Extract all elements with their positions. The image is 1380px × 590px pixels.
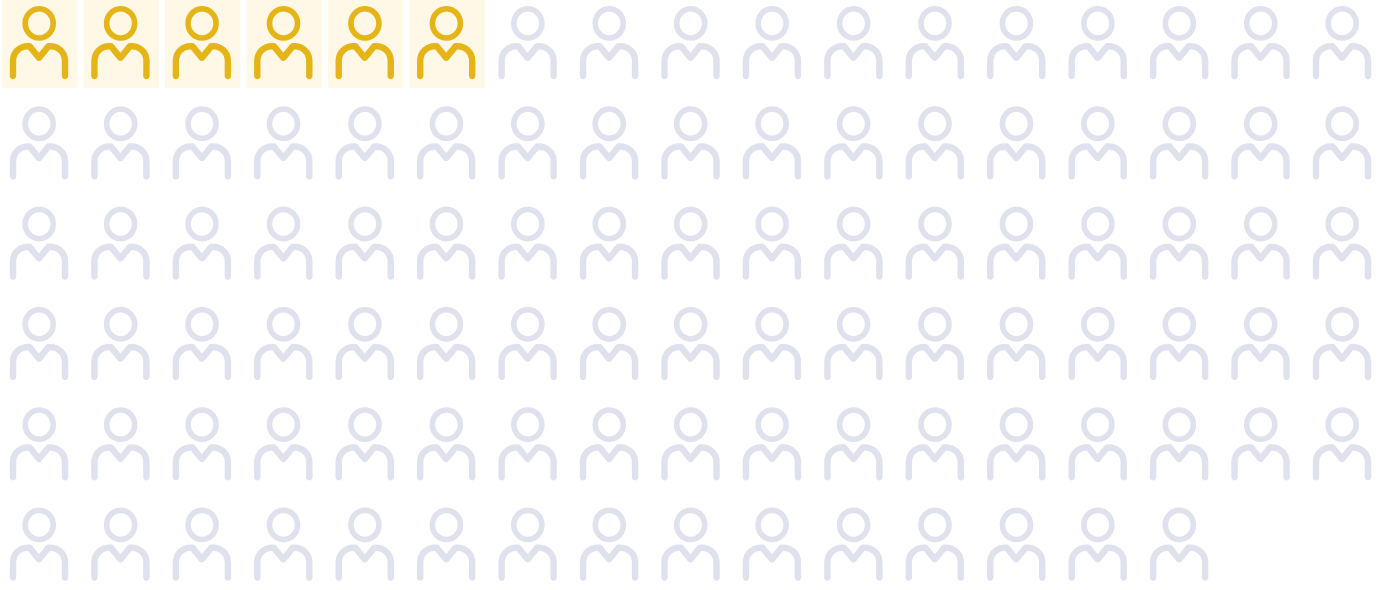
row 5: grey people bbox=[13, 410, 1368, 477]
row 1: remaining grey people bbox=[502, 9, 1368, 76]
row 6: grey people bbox=[13, 510, 1205, 578]
row 2: grey people bbox=[13, 109, 1368, 176]
icon: highlighted person 3 bbox=[165, 0, 240, 88]
icon: highlighted person 5 bbox=[328, 0, 403, 88]
row 3: grey people bbox=[13, 209, 1368, 277]
row 4: grey people bbox=[13, 310, 1368, 377]
icon: highlighted person 1 bbox=[2, 0, 78, 88]
icon: highlighted person 2 bbox=[83, 0, 159, 88]
icon: highlighted person 4 bbox=[246, 0, 322, 88]
icon: highlighted person 6 bbox=[409, 0, 485, 88]
